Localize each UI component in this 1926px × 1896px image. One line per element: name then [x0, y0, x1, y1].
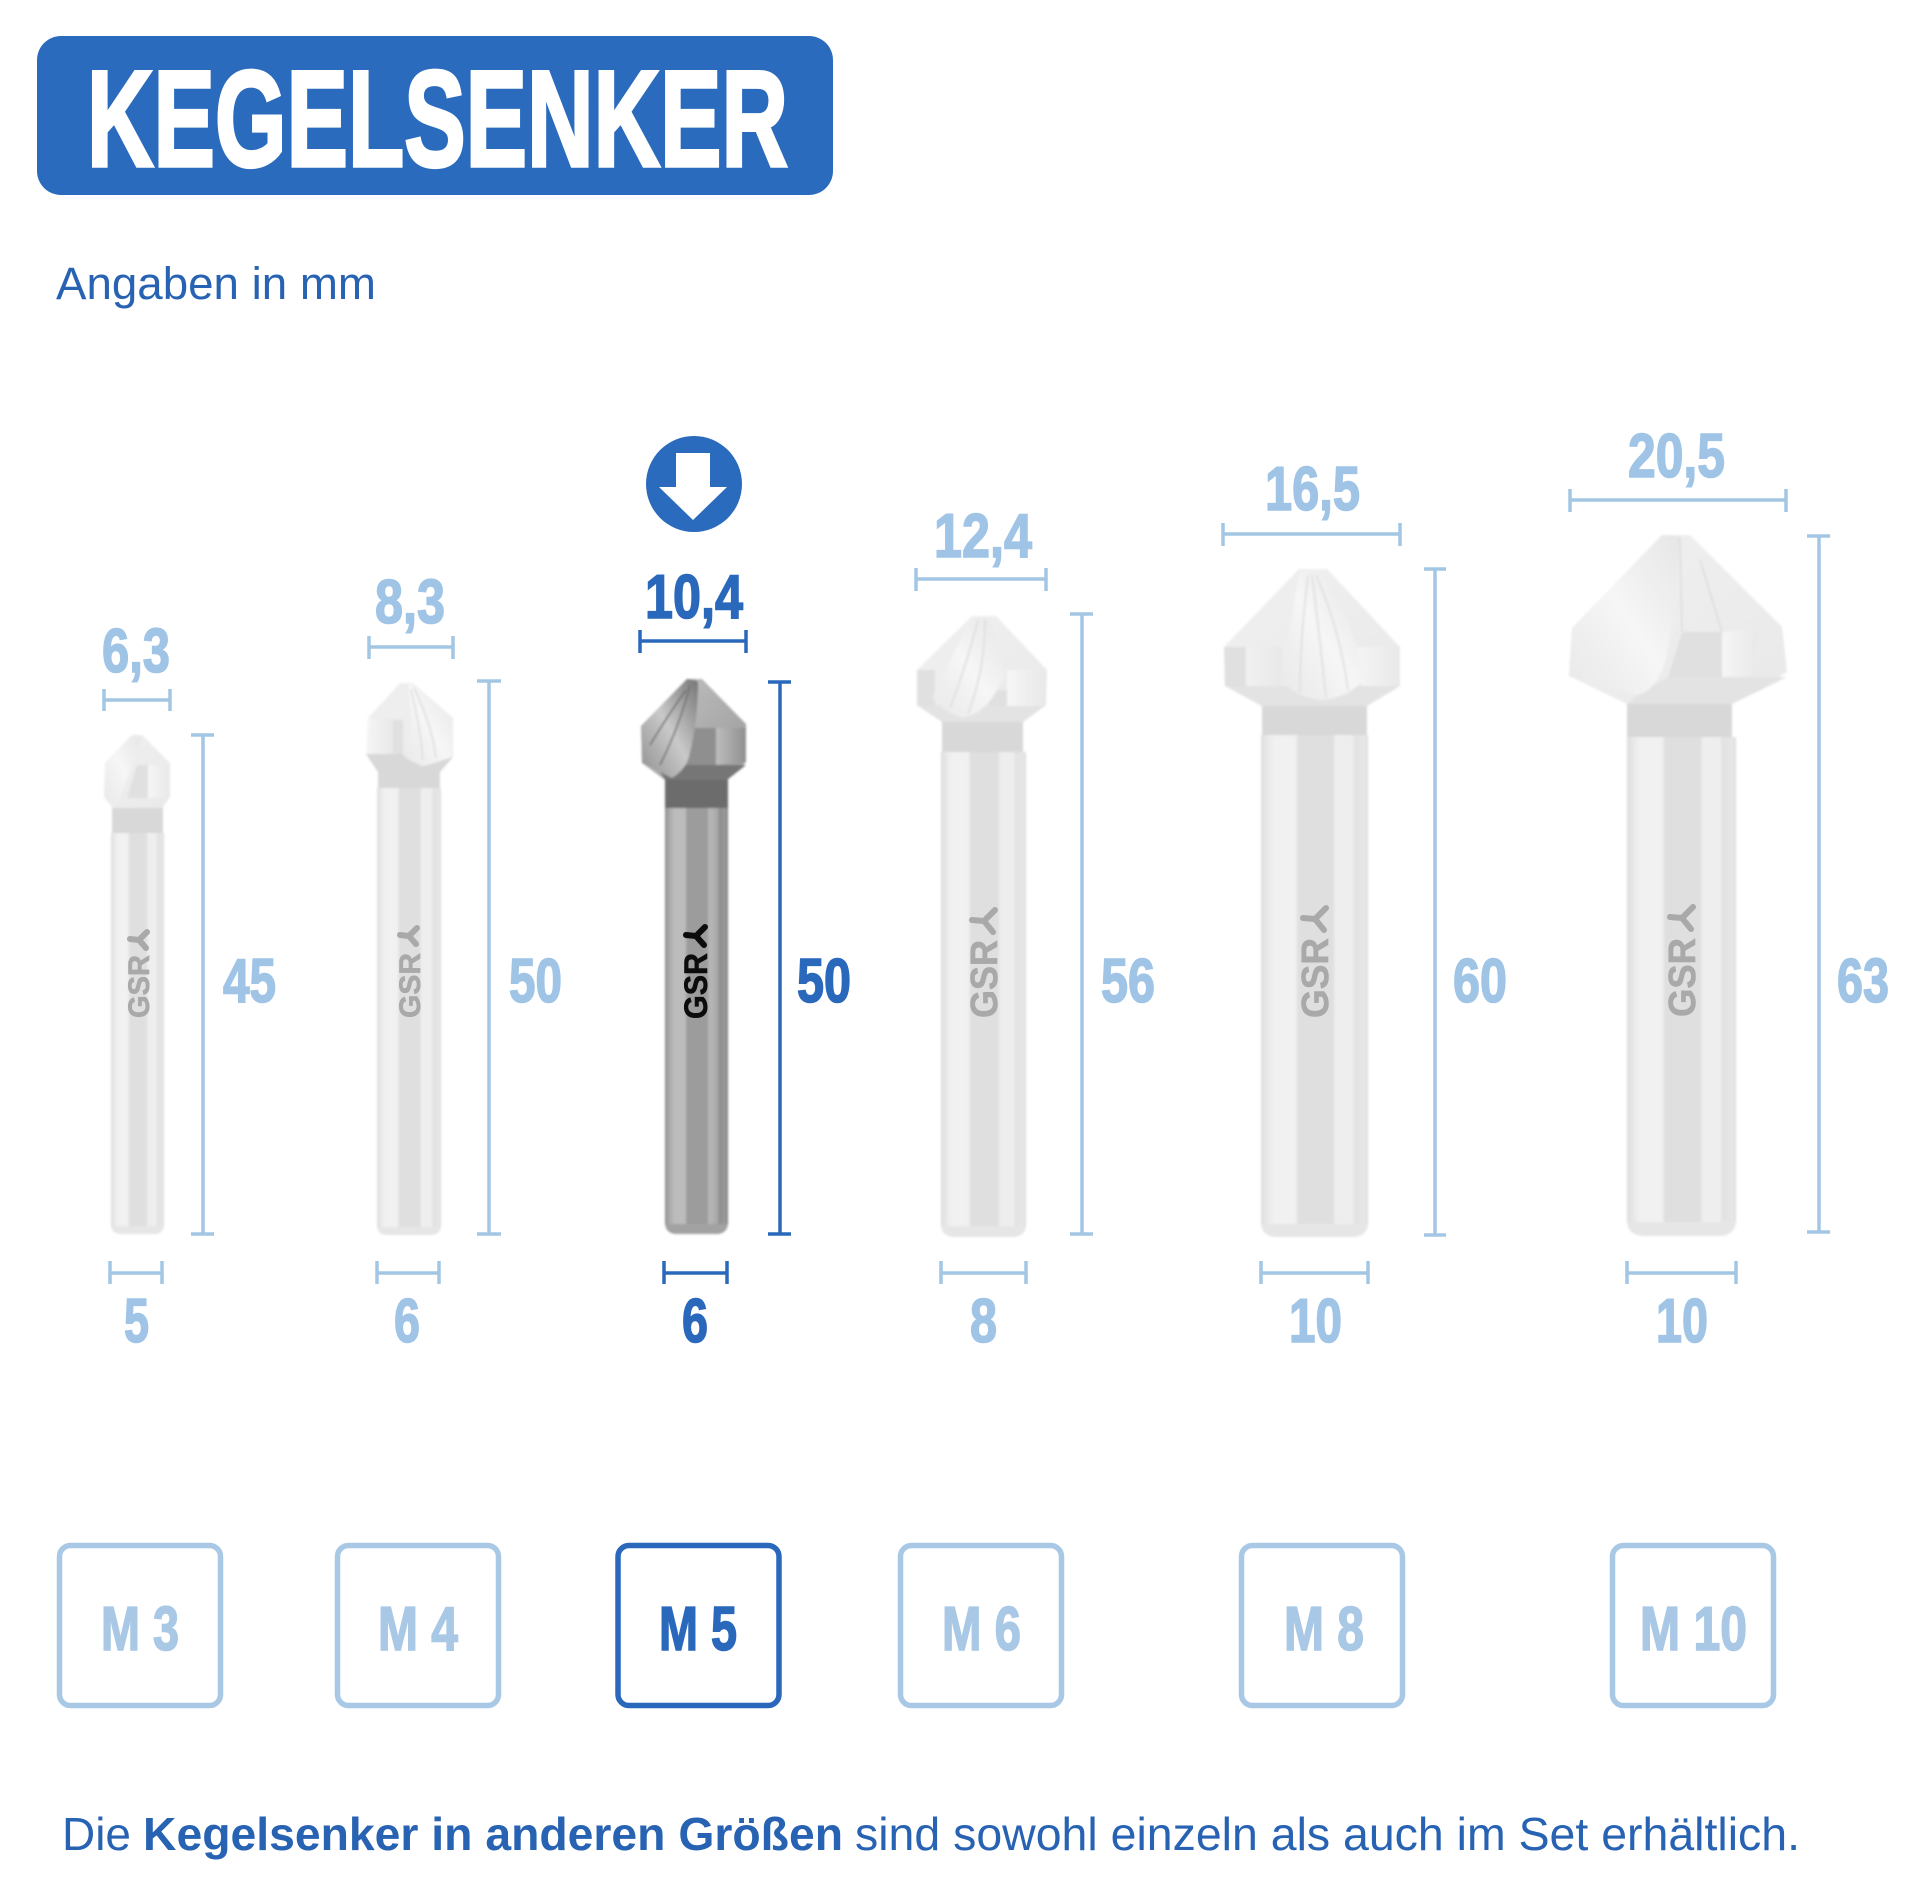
drill M5	[641, 679, 746, 1234]
drill M8: GSR	[1295, 938, 1337, 1018]
subtitle: units: Angaben in mm	[56, 258, 376, 309]
drill M4: GSR	[394, 953, 427, 1018]
drill M3	[104, 735, 170, 1234]
length dimension 56: 56	[1101, 947, 1155, 1016]
size box M 10: M 10	[1640, 1595, 1747, 1664]
footer note	[62, 1808, 1800, 1860]
length dimension 50	[768, 682, 851, 1234]
column: M10	[1569, 422, 1889, 1356]
size box M 8	[1242, 1546, 1402, 1706]
length dimension 60: 60	[1453, 947, 1507, 1016]
length dimension 45	[191, 735, 276, 1234]
shank dimension 10	[1261, 1261, 1368, 1356]
top dimension 8,3: 8,3	[375, 568, 445, 637]
title banner	[37, 36, 833, 196]
top dimension 16,5: 16,5	[1265, 455, 1360, 524]
top dimension 6,3	[102, 617, 170, 711]
footer note: sind sowohl einzeln als auch im Set erhältlich.	[855, 1808, 1800, 1860]
length dimension 56	[1070, 614, 1155, 1234]
shank dimension 10: 10	[1656, 1287, 1708, 1356]
length dimension 50	[477, 681, 562, 1234]
shank dimension 10	[1627, 1261, 1736, 1356]
drill M10	[1569, 535, 1787, 1236]
drill M6: GSR	[964, 940, 1006, 1018]
size box M 3: M 3	[101, 1595, 179, 1664]
shank dimension 6	[377, 1261, 439, 1356]
length dimension 50: 50	[509, 947, 562, 1016]
size box M 6: M 6	[942, 1595, 1021, 1664]
shank dimension 6: 6	[682, 1287, 708, 1356]
shank dimension 10: 10	[1289, 1287, 1342, 1356]
size box M 6	[900, 1546, 1062, 1706]
icon: down arrow in circle	[646, 436, 742, 532]
column: M3	[102, 617, 276, 1356]
title banner: KEGELSENKER	[87, 43, 788, 196]
shank dimension 8	[941, 1261, 1026, 1356]
shank dimension 5: 5	[124, 1287, 149, 1356]
shank dimension 8: 8	[970, 1287, 997, 1356]
top dimension 12,4	[916, 502, 1046, 591]
size box M 4	[338, 1546, 498, 1706]
top dimension 6,3: 6,3	[102, 617, 170, 686]
drill M8	[1224, 569, 1400, 1237]
top dimension 10,4	[640, 563, 746, 653]
size box M 10	[1612, 1546, 1774, 1706]
column: M5 highlighted	[640, 436, 851, 1356]
footer note: Kegelsenker in anderen Größen	[143, 1808, 843, 1860]
top dimension 20,5: 20,5	[1628, 422, 1725, 491]
footer note: Die	[62, 1808, 131, 1860]
shank dimension 6: 6	[394, 1287, 420, 1356]
length dimension 63: 63	[1837, 947, 1889, 1016]
top dimension 20,5	[1570, 422, 1786, 512]
length dimension 60	[1424, 569, 1507, 1235]
column: M4	[366, 568, 562, 1356]
drill M6	[917, 616, 1047, 1237]
top dimension 12,4: 12,4	[934, 502, 1032, 571]
size box M 5 highlighted	[618, 1546, 779, 1706]
drill M4	[366, 683, 453, 1235]
size box M 5 highlighted: M 5	[659, 1595, 737, 1664]
column: M8	[1223, 455, 1507, 1356]
length dimension 63	[1807, 536, 1889, 1232]
shank dimension 6	[664, 1261, 727, 1356]
top dimension 8,3	[369, 568, 453, 659]
column: M6	[916, 502, 1155, 1356]
top dimension 16,5	[1223, 455, 1400, 546]
drill M5: GSR	[678, 953, 714, 1019]
length dimension 45: 45	[223, 947, 276, 1016]
length dimension 50: 50	[797, 947, 851, 1016]
size box M 4: M 4	[378, 1595, 458, 1664]
drill M3: GSR	[123, 955, 156, 1018]
top dimension 10,4: 10,4	[645, 563, 743, 632]
size box M 8: M 8	[1284, 1595, 1364, 1664]
shank dimension 5	[110, 1261, 162, 1356]
drill M10: GSR	[1662, 938, 1704, 1017]
size box M 3	[60, 1546, 220, 1706]
